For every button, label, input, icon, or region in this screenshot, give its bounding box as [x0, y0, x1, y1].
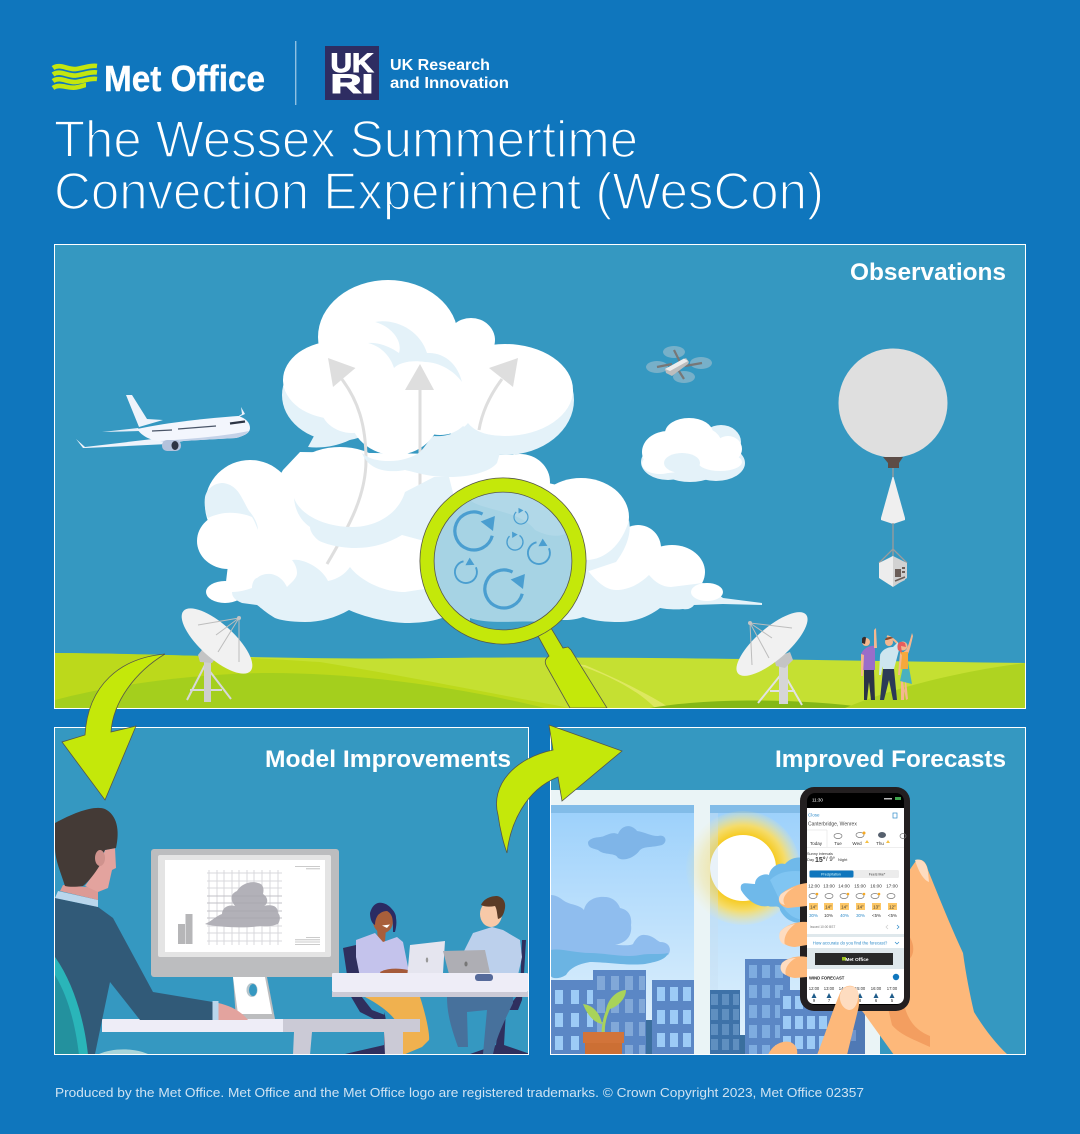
wind forecast: 16:00	[871, 986, 882, 991]
phone on table	[475, 974, 493, 981]
sun	[686, 811, 800, 925]
cloud: upper left pane	[588, 826, 665, 859]
chair teal	[55, 957, 150, 1055]
panel background	[54, 728, 528, 1054]
panel: Improved Forecasts	[550, 728, 1026, 1055]
man 2 chair	[490, 940, 526, 1010]
precipitation percentages: <5%	[888, 913, 897, 918]
forecast summary: Day	[807, 857, 814, 862]
accuracy question row: How accurate do you find the forecast?	[813, 940, 888, 946]
woman trousers	[365, 997, 429, 1055]
hourly times: 13:00	[823, 884, 835, 888]
hourly temperatures: 13°	[873, 904, 880, 909]
man neck	[60, 885, 98, 900]
caption lines	[295, 866, 320, 944]
heading: Model Improvements: Model Improvements	[265, 746, 511, 773]
arrow: observations to model	[62, 654, 165, 800]
person: purple shirt	[861, 628, 877, 700]
cloud crescent shading	[294, 423, 505, 548]
buildings left	[551, 970, 694, 1055]
window right jamb	[865, 1005, 880, 1055]
icon: weather balloon	[838, 348, 948, 587]
right table and colleagues	[332, 896, 530, 1055]
logo: UKRI	[325, 46, 509, 100]
day tabs	[807, 830, 906, 848]
location header	[808, 812, 897, 828]
icon: radar dish right	[736, 612, 808, 706]
bar chart	[178, 914, 192, 944]
updraft arrows	[327, 358, 518, 564]
arrow: model to forecasts	[497, 725, 622, 853]
man sweater	[55, 898, 213, 1054]
title: The Wessex Summertime	[54, 111, 638, 169]
man 2 laptop	[443, 950, 490, 978]
man hair	[55, 808, 118, 887]
glass rim	[427, 485, 579, 637]
status bar: 11:30	[812, 798, 823, 802]
lower cloud shading	[205, 483, 762, 623]
window right pane	[686, 805, 865, 1055]
footer credit: Produced by the Met Office. Met Office and the Met Office logo are registered trademarks. © Crown Copyright 2023, Met Office 02357	[55, 1085, 864, 1100]
person: red hair	[897, 633, 913, 700]
wind forecast: 5	[891, 998, 894, 1003]
hourly temperatures: 14°	[825, 904, 832, 909]
wind forecast	[809, 974, 899, 1003]
model grid chart	[205, 870, 282, 945]
hourly temperatures: 14°	[841, 904, 848, 909]
man face	[85, 848, 116, 892]
panel gap below hand	[880, 1030, 900, 1055]
precipitation percentages: 30%	[809, 913, 818, 918]
pressing finger	[817, 986, 859, 1055]
phone body	[800, 787, 910, 1011]
forecast summary: 15°	[815, 856, 826, 864]
cloud: large left pane	[551, 895, 670, 962]
instrument box	[879, 556, 893, 587]
wind forecast: 17:00	[887, 986, 898, 991]
woman face	[373, 909, 393, 933]
cloud: lower band	[551, 950, 668, 978]
grass hills	[55, 653, 1025, 708]
wordmark: Met Office: Met Office	[104, 58, 265, 99]
precipitation percentages: 10%	[824, 913, 833, 918]
UKRI square	[325, 46, 379, 100]
UKRI name: UK Research	[390, 57, 490, 74]
wind forecast: 15:00	[855, 986, 866, 991]
forecast summary: / 9°	[826, 857, 836, 863]
smartphone	[800, 787, 910, 1011]
hourly times	[808, 884, 898, 888]
Met Office banner: Met Office	[845, 957, 869, 963]
cloud: large cumulonimbus	[197, 280, 762, 623]
title	[54, 111, 824, 221]
wind forecast: 13:00	[824, 986, 835, 991]
person: pale shirt	[879, 636, 899, 700]
logo: Met Office	[53, 58, 265, 99]
panel: Observations	[54, 244, 1026, 708]
logo: UKRI: and Innovation	[390, 75, 509, 92]
man 2 trousers	[447, 997, 513, 1054]
icon: aeroplane	[76, 395, 250, 451]
parachute	[881, 475, 905, 524]
location header: Canterbridge, Wenrex	[808, 822, 857, 828]
wind forecast: 9	[813, 998, 816, 1003]
desk left part	[102, 1019, 283, 1032]
hourly times: 12:00	[808, 884, 820, 888]
plane tail	[126, 395, 163, 427]
balloon envelope	[838, 348, 948, 458]
forecast summary	[807, 852, 848, 864]
cloud: small cumulus	[641, 418, 745, 482]
panel: Model Improvements	[54, 728, 530, 1055]
precipitation toggle: Precipitation	[821, 872, 841, 876]
precipitation toggle	[809, 870, 899, 878]
precipitation percentages	[809, 913, 897, 918]
day tabs: Today	[810, 841, 823, 846]
woman neck	[377, 928, 386, 942]
heading: Improved Forecasts: Improved Forecasts	[775, 746, 1006, 773]
balloon neck	[883, 457, 903, 468]
status bar	[812, 797, 901, 802]
plane wing far	[76, 439, 184, 448]
hourly temperatures: 14°	[810, 904, 817, 909]
hourly times: 16:00	[870, 884, 882, 888]
plane engine	[162, 440, 181, 451]
icon: Met Office waves	[53, 66, 97, 88]
buildings right	[710, 959, 865, 1055]
wind forecast: WIND FORECAST	[809, 976, 845, 980]
precipitation percentages: <5%	[872, 913, 881, 918]
hourly times: 14:00	[838, 884, 850, 888]
icon: drone	[646, 346, 712, 383]
precipitation percentages: 40%	[840, 913, 849, 918]
phone screen	[807, 793, 904, 1005]
finger 1	[779, 883, 807, 908]
forecast summary: Sunny intervals	[807, 852, 833, 856]
panel background	[54, 244, 1026, 708]
hourly temperatures: 14°	[857, 904, 864, 909]
icon: radar dish left	[182, 608, 252, 702]
precipitation percentages: 30%	[856, 913, 865, 918]
desk right part	[283, 1019, 420, 1055]
plane windows	[152, 426, 216, 431]
panel background	[550, 728, 1026, 1054]
magnifying glass	[427, 485, 607, 708]
palm corner	[768, 1042, 797, 1055]
heading: Observations: Observations	[850, 259, 1006, 286]
hourly times: 17:00	[886, 884, 898, 888]
wind forecast: 14:00	[839, 986, 850, 991]
man collar	[55, 891, 98, 907]
hand holding phone (back)	[850, 860, 1008, 1055]
wind forecast: 6	[875, 998, 878, 1003]
wind forecast: 12:00	[809, 986, 820, 991]
upper swirl shading	[368, 321, 462, 382]
woman hair	[370, 903, 396, 932]
woman chair	[343, 945, 386, 1022]
hourly temperatures: 12°	[889, 904, 896, 909]
group of people looking up	[861, 628, 913, 700]
potted plant	[583, 990, 626, 1055]
finger 2	[780, 922, 807, 947]
glass handle	[538, 628, 607, 708]
UKRI letters: UK	[330, 48, 374, 78]
issued time row: Issued 10:00 BST	[810, 925, 835, 929]
logo divider	[295, 41, 296, 105]
location header: Close	[808, 812, 820, 818]
lens	[434, 500, 572, 622]
monitor stand	[233, 977, 275, 1019]
grey cloud on grid	[205, 882, 280, 927]
accuracy question row	[807, 934, 904, 946]
hourly times: 15:00	[854, 884, 866, 888]
precipitation toggle: Feels like*	[869, 872, 886, 876]
issued time row	[810, 925, 899, 929]
title: Convection Experiment (WesCon)	[54, 163, 824, 221]
wind forecast: 8	[859, 998, 862, 1003]
hourly temperatures	[809, 903, 897, 910]
window frame	[551, 790, 880, 1055]
logo: UKRI: RI	[330, 69, 374, 99]
plane fuselage	[137, 416, 250, 442]
day tabs: Thu	[876, 841, 884, 846]
wind forecast: 7	[828, 998, 831, 1003]
man at desk	[55, 808, 248, 1054]
forecast summary: Night	[838, 857, 848, 862]
lower cloud white puffs	[197, 447, 705, 610]
man hand	[218, 1003, 248, 1020]
man 2 shirt	[463, 927, 522, 977]
Met Office banner	[807, 948, 904, 969]
hourly weather icons	[809, 893, 895, 898]
day tabs: Tue	[834, 841, 842, 846]
monitor frame	[151, 849, 339, 977]
woman laptop	[407, 941, 445, 979]
turbulence swirls	[450, 507, 555, 608]
computer monitor	[151, 849, 339, 1019]
hand fingers (front)	[768, 883, 859, 1055]
table top	[332, 973, 528, 992]
finger 3	[781, 956, 807, 978]
plane winglet	[238, 407, 245, 416]
woman shirt	[356, 933, 408, 977]
man 2 head	[480, 901, 502, 927]
upper cloud shadow base	[282, 384, 574, 455]
upper cloud white domes	[283, 280, 573, 455]
cloud in front of sun	[741, 857, 807, 923]
day tabs: Wed	[852, 841, 862, 846]
window left pane	[551, 805, 694, 1055]
